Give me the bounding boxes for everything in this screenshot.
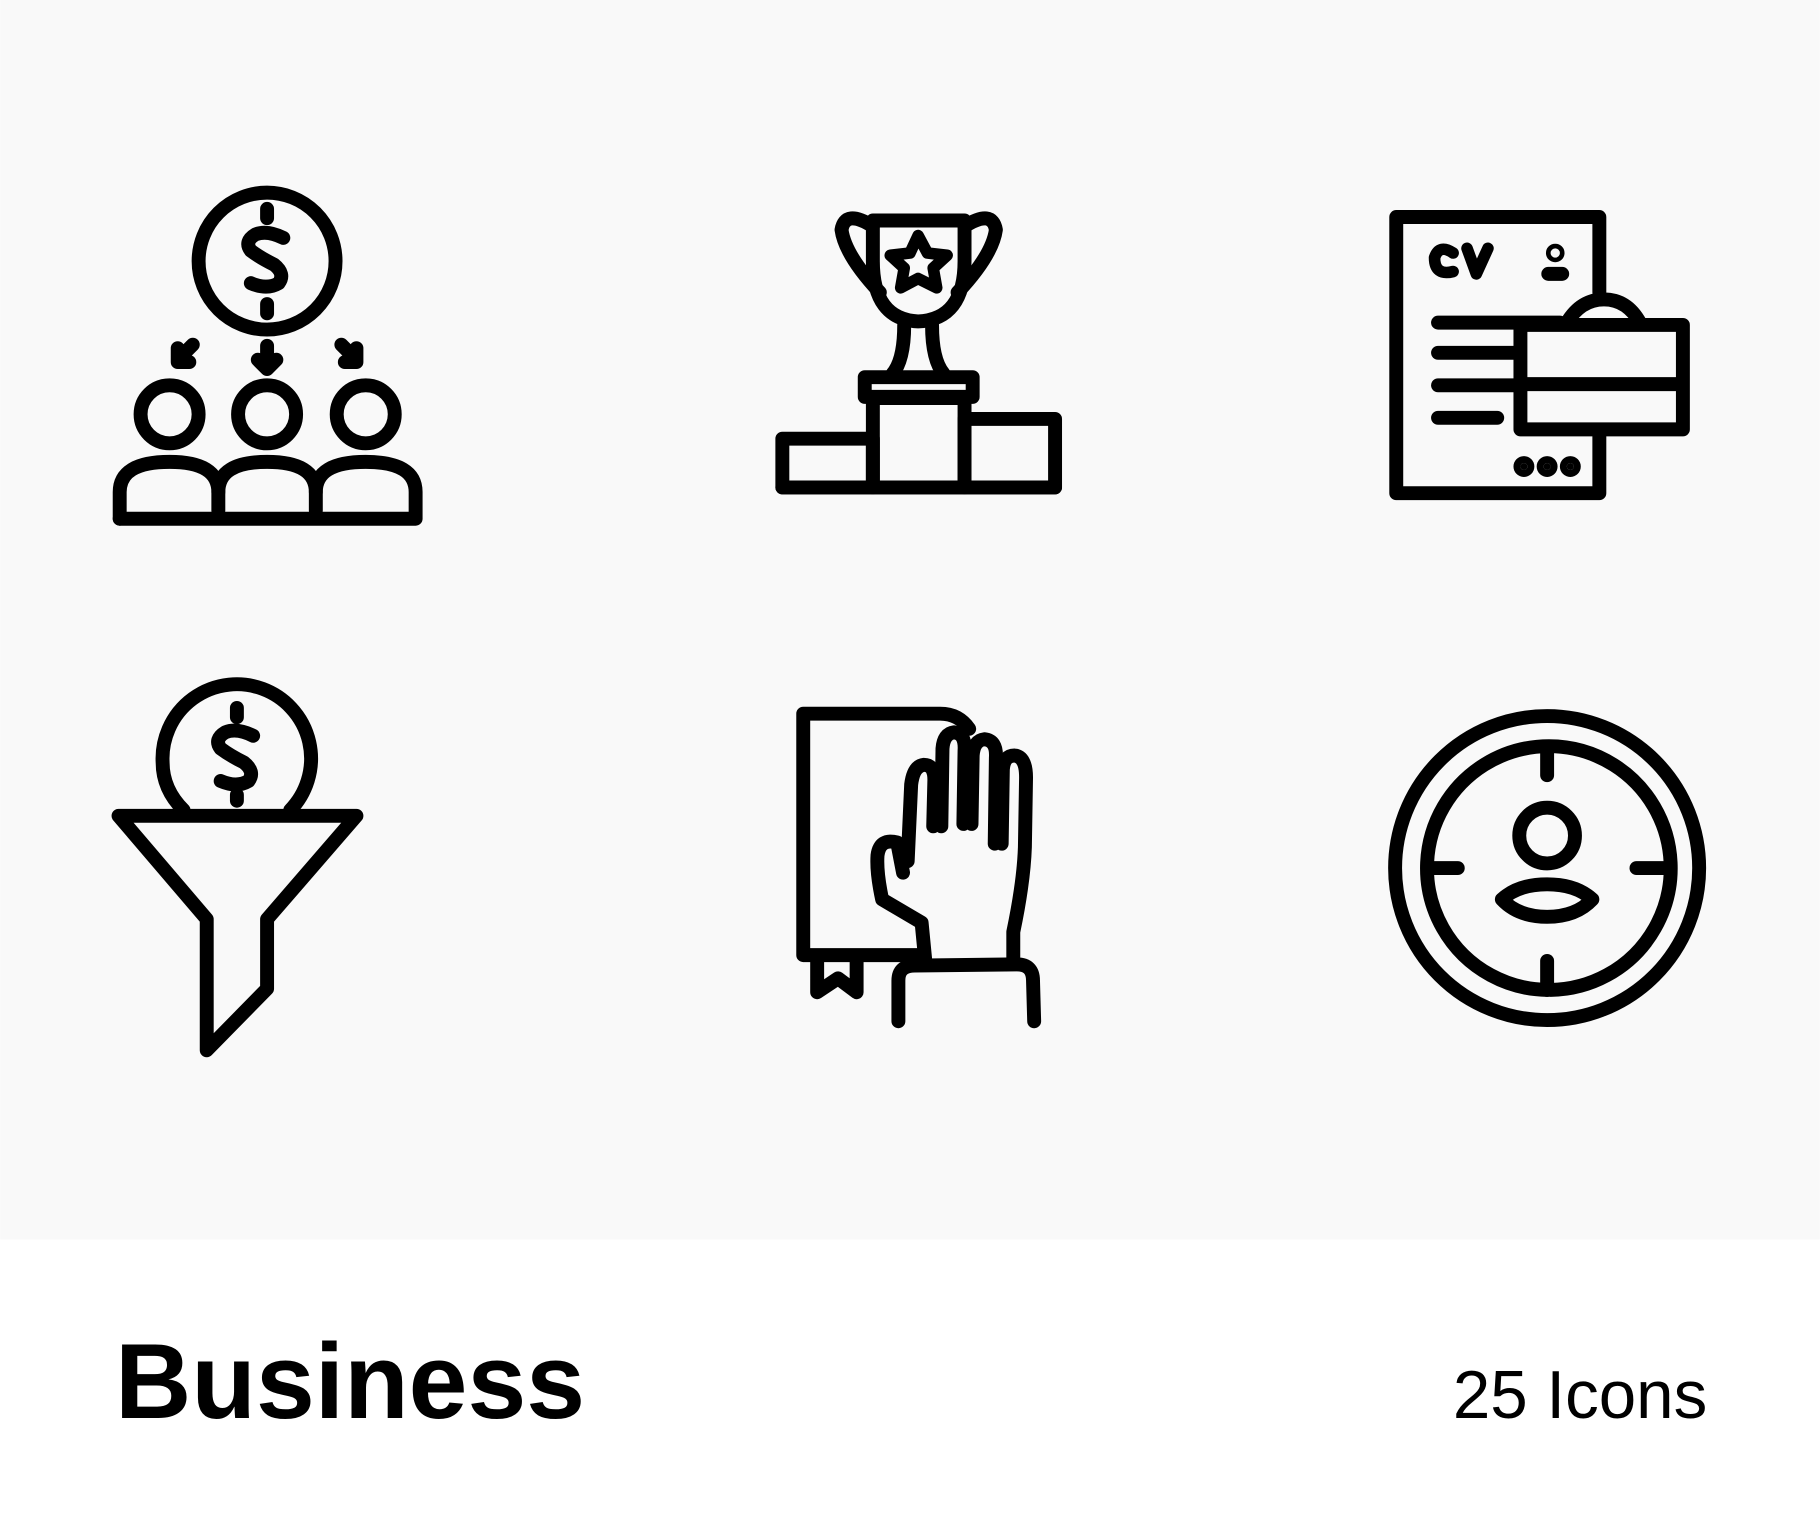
icon: team funding [120, 193, 416, 519]
icon: CV document [1396, 217, 1683, 493]
icon: hand on book [803, 714, 1034, 1021]
title: Business [115, 1321, 585, 1441]
icon: trophy podium [782, 218, 1055, 487]
icon: sales funnel [119, 684, 356, 1050]
icon: target customer [1395, 716, 1699, 1020]
icon count: 25 Icons [1453, 1358, 1707, 1433]
